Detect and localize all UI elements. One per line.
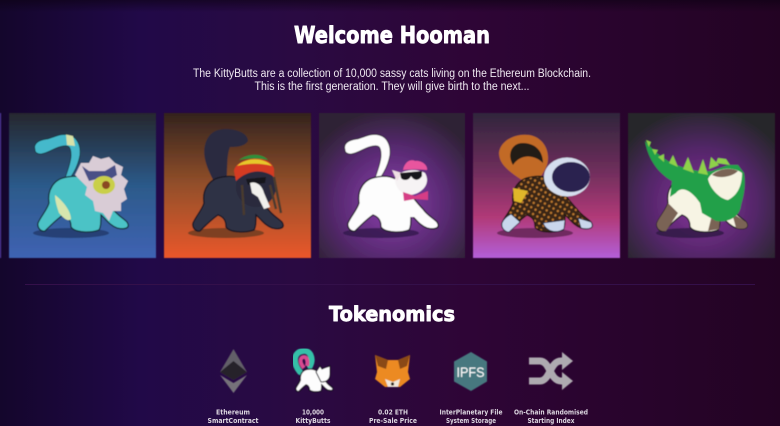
tile: white cat with pink bow and sunglasses [319,113,465,258]
token item: Ethereum: SmartContract [208,417,258,425]
title: Welcome Hooman: Welcome Hooman [294,23,490,49]
intro text [193,68,591,93]
tile: teal cat with white mane [9,113,156,258]
token item: IPFS [440,352,503,425]
token item: KittyButts: KittyButts [296,417,331,425]
token item: randomised index [514,352,588,425]
token item: randomised index: Starting Index [528,417,575,425]
token item: KittyButts: 10,000 [302,408,324,416]
token item: presale price: Pre-Sale Price [369,417,417,425]
token item: KittyButts [295,351,333,425]
token item: presale price [369,355,417,425]
intro text: This is the first generation. They will give birth to the next... [254,81,530,93]
token item: Ethereum [208,349,258,425]
token item: presale price: 0.02 ETH [378,408,408,416]
icon: IPFS hexagon: IPFS [456,364,484,380]
title: Tokenomics: Tokenomics [329,302,455,326]
sliver of previous tile [0,113,1,258]
token item: randomised index: On-Chain Randomised [514,408,588,416]
tile: astronaut cat in patterned suit [473,113,620,258]
icon: rainbow tailed kitty [295,351,333,392]
icon: metamask fox [375,355,410,387]
icon: shuffle arrows [529,352,573,390]
tile: black cat with rasta hat [164,113,311,258]
cat gallery [0,113,775,258]
icon: ethereum diamond [220,349,247,393]
token item: Ethereum: Ethereum [216,408,250,416]
token item: IPFS: System Storage [446,417,496,425]
tile: cat in green dinosaur hoodie [628,113,775,258]
intro text: The KittyButts are a collection of 10,000 sassy cats living on the Ethereum Blockchain. [193,68,591,80]
token item: IPFS: InterPlanetary File [440,408,503,416]
